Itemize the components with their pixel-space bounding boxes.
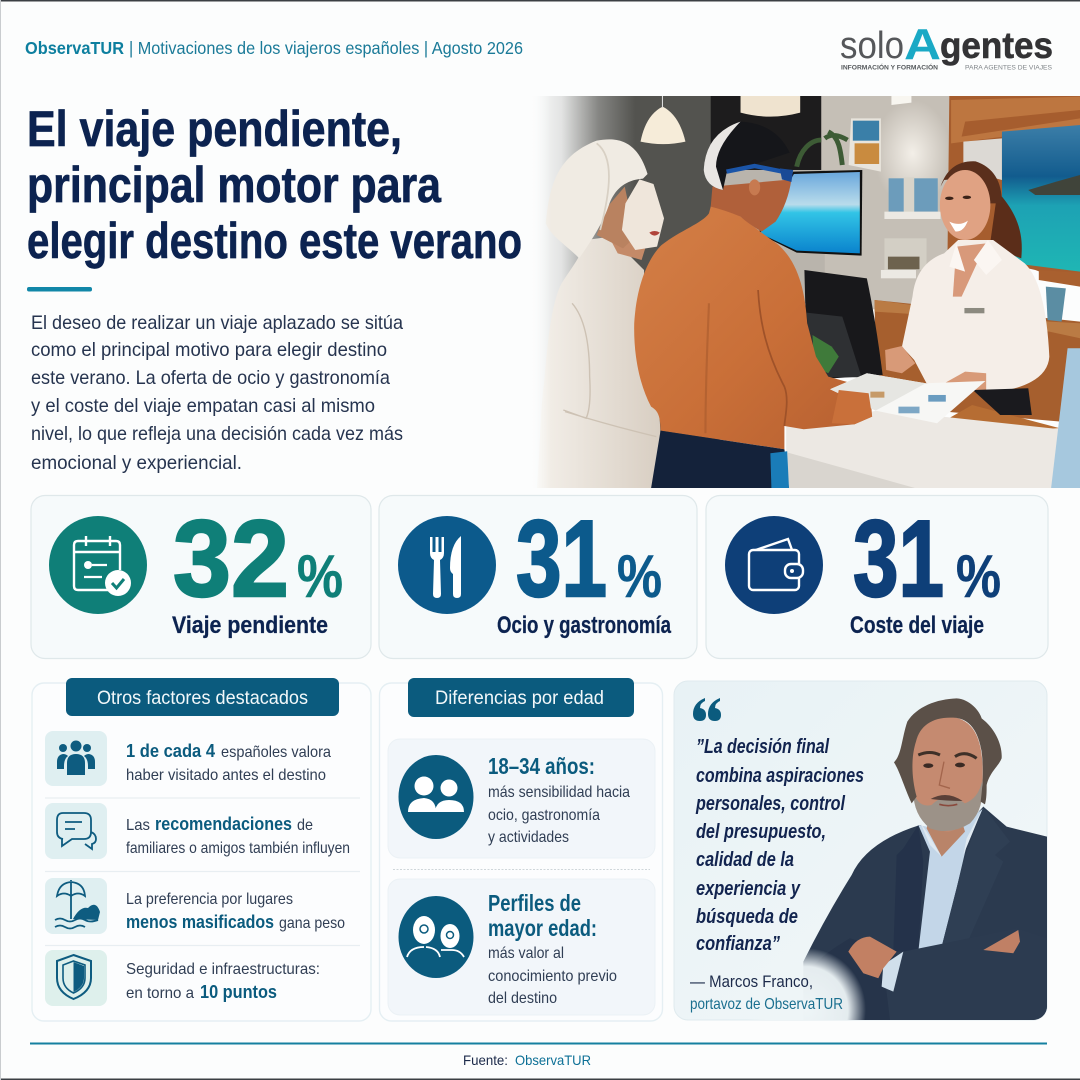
age group: 18–34: ocio, gastronomía — [488, 807, 600, 824]
footer source — [463, 1052, 591, 1068]
footer source: ObservaTUR — [515, 1052, 591, 1068]
logo: soloAgentes: A — [904, 20, 941, 69]
wood panel and sea poster — [948, 96, 1080, 287]
logo: soloAgentes: INFORMACIÓN Y FORMACIÓN — [841, 62, 938, 72]
agent — [990, 197, 1022, 258]
factor: security — [126, 961, 320, 1002]
heading pill — [66, 678, 339, 716]
icon: shield — [45, 950, 107, 1006]
quote text: personales, control — [695, 793, 845, 815]
logo: soloAgentes: solo — [840, 25, 904, 67]
intro paragraph — [31, 312, 403, 474]
factor: recommendations: Las — [126, 817, 150, 834]
icon: beach umbrella — [45, 878, 107, 934]
man in swimming cap — [634, 200, 872, 449]
stat card: viaje pendiente: 32 — [173, 498, 289, 620]
panel: diferencias por edad — [380, 678, 662, 1021]
stat card: coste del viaje: Coste del viaje — [850, 612, 984, 639]
panel: otros factores destacados — [32, 678, 371, 1021]
stat card: ocio y gastronomía: % — [617, 543, 662, 610]
age group: older profiles: Perfiles de — [488, 890, 581, 916]
factor: less crowded places — [126, 891, 345, 932]
logo: soloAgentes — [840, 20, 1053, 72]
header line: source and date: | Motivaciones de los viajeros españoles | Agosto 2026 — [129, 38, 523, 58]
stat card: viaje pendiente: Viaje pendiente — [172, 612, 328, 639]
icon: wallet — [725, 516, 823, 614]
icon: calendar with check — [49, 516, 147, 614]
factor: less crowded places: La preferencia por lugares — [126, 891, 293, 908]
age group: 18–34: más sensibilidad hacia — [488, 784, 630, 801]
quote text: calidad de la — [696, 849, 794, 871]
panel: quote with spokesperson — [674, 680, 1048, 1020]
intro paragraph: como el principal motivo para elegir destino — [31, 339, 387, 361]
stat card: ocio y gastronomía — [379, 496, 697, 658]
intro paragraph: nivel, lo que refleja una decisión cada vez más — [31, 423, 403, 445]
head — [912, 717, 983, 832]
TV — [758, 170, 862, 256]
quote text — [695, 736, 864, 955]
footer source: Fuente: — [463, 1052, 508, 1068]
stat card: viaje pendiente: % — [297, 543, 343, 610]
cabinet — [875, 300, 1080, 423]
intro paragraph: El deseo de realizar un viaje aplazado se sitúa — [31, 312, 403, 334]
title: elegir destino este verano — [27, 213, 522, 269]
factor: recommendations: familiares o amigos también influyen — [126, 840, 350, 857]
hero photo: couple in bathrobe and swimwear at a travel agency — [530, 96, 1080, 489]
factor: recommendations: recomendaciones — [155, 814, 292, 834]
heading pill: Otros factores destacados — [97, 688, 308, 709]
heading pill: Diferencias por edad — [435, 688, 604, 709]
attribution: portavoz de ObservaTUR — [690, 996, 843, 1013]
age group: 18–34 — [388, 739, 655, 858]
quote text: búsqueda de — [696, 906, 798, 928]
factor: recommendations — [126, 814, 350, 857]
factor: visited before: 1 de cada 4 — [126, 741, 215, 761]
title: El viaje pendiente, — [27, 101, 402, 157]
quote text: combina aspiraciones — [696, 765, 864, 787]
age group: 18–34: y actividades — [488, 829, 569, 846]
attribution: — Marcos Franco, — [690, 972, 813, 991]
quote text: ”La decisión final — [696, 736, 829, 758]
crossed arms — [803, 938, 917, 1020]
stat card: coste del viaje: % — [956, 543, 1001, 610]
quote text: experiencia y — [696, 878, 801, 900]
factor: security: en torno a — [126, 985, 194, 1002]
logo: soloAgentes: gentes — [940, 25, 1053, 66]
age group: older profiles: más valor al — [488, 945, 564, 962]
intro paragraph: emocional y experiencial. — [31, 452, 242, 474]
attribution — [690, 972, 843, 1013]
title accent rule — [27, 287, 92, 292]
stat card: coste del viaje — [706, 496, 1048, 658]
title — [27, 101, 522, 269]
stat card: ocio y gastronomía: Ocio y gastronomía — [497, 612, 671, 639]
factor: visited before: haber visitado antes el destino — [126, 767, 326, 784]
intro paragraph: este verano. La oferta de ocio y gastronomía — [31, 367, 390, 389]
stat card: coste del viaje: 31 — [853, 498, 944, 620]
portrait: Marcos Franco — [758, 698, 1047, 1020]
factor: less crowded places: menos masificados — [126, 912, 274, 932]
stat card: ocio y gastronomía: 31 — [516, 498, 607, 620]
factor: recommendations: de — [297, 817, 313, 834]
icon: fork and knife — [398, 516, 496, 614]
icon: people — [45, 731, 107, 786]
icon: two young people — [398, 755, 474, 839]
woman in bathrobe — [555, 238, 660, 488]
icon: chat bubbles — [45, 803, 107, 859]
age group: older profiles: mayor edad: — [488, 915, 597, 941]
factor: less crowded places: gana peso — [279, 915, 345, 932]
icon: quotation marks — [693, 698, 721, 721]
factor: visited before — [126, 741, 331, 784]
factor: security: Seguridad e infraestructuras: — [126, 961, 320, 978]
lamps — [641, 107, 685, 144]
counter — [950, 405, 1058, 428]
age group: older profiles: conocimiento previo — [488, 968, 617, 985]
title: principal motor para — [27, 157, 442, 213]
stat card: viaje pendiente — [31, 496, 371, 658]
icon: older couple with glasses — [398, 896, 474, 978]
quote text: del presupuesto, — [696, 821, 826, 843]
footer rule — [30, 1042, 1047, 1044]
header line: source and date: ObservaTUR — [25, 38, 124, 58]
heading pill — [408, 678, 634, 717]
dark chair and monitor — [804, 270, 883, 380]
age group: older profiles — [388, 879, 655, 1015]
wall brochures — [849, 118, 881, 172]
plant — [797, 132, 848, 167]
age group: 18–34: 18–34 años: — [488, 753, 595, 779]
age group: older profiles: del destino — [488, 990, 557, 1007]
factor: security: 10 puntos — [200, 982, 277, 1002]
logo: soloAgentes: PARA AGENTES DE VIAJES — [965, 64, 1052, 72]
factor: visited before: españoles valora — [221, 744, 331, 761]
intro paragraph: y el coste del viaje empatan casi al mismo — [31, 395, 375, 417]
quote text: confianza” — [696, 933, 780, 955]
